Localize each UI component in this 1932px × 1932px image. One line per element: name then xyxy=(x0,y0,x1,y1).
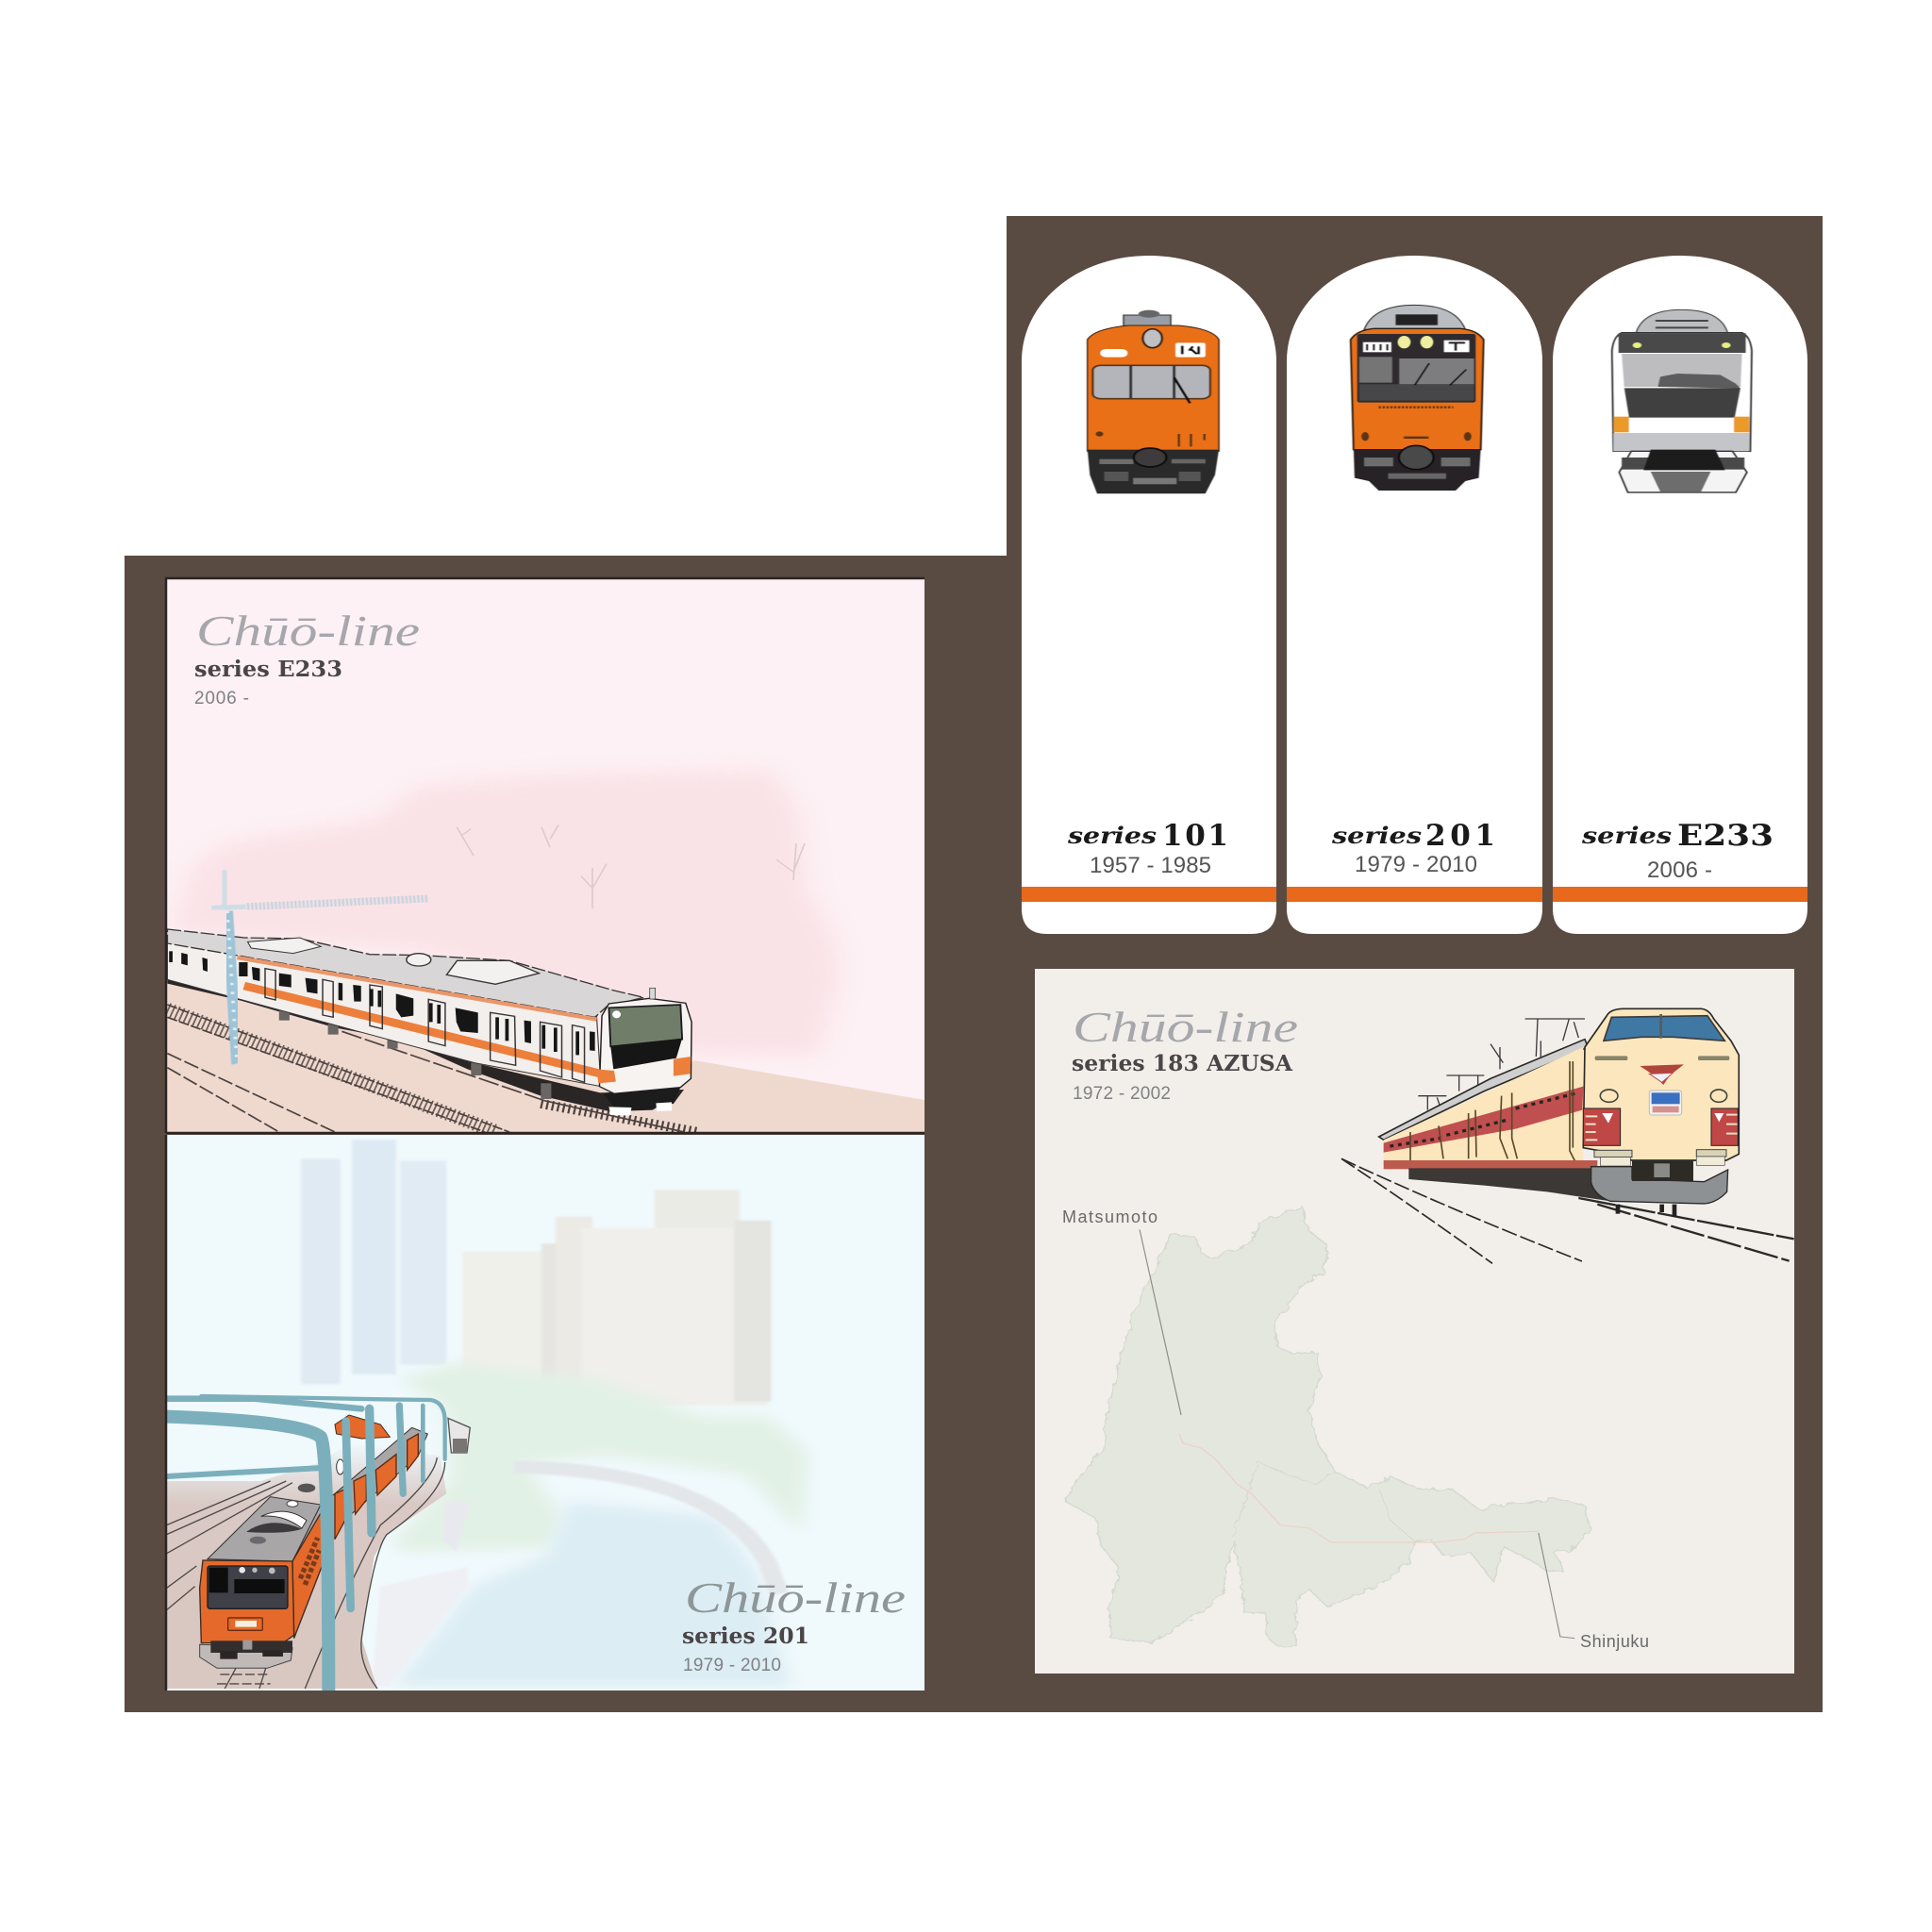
heading: series E233 xyxy=(194,657,342,682)
script title: Chūō-line xyxy=(685,1574,906,1622)
leader line Shinjuku xyxy=(1539,1533,1574,1639)
doors xyxy=(265,969,585,1082)
city buildings and river xyxy=(301,1140,808,1687)
train series 201 with catenary xyxy=(167,1396,470,1693)
script title: Chūō-line xyxy=(1073,1003,1298,1051)
years: 2006 - xyxy=(1647,858,1712,883)
train front E233 xyxy=(1612,309,1752,492)
train E233 xyxy=(167,929,698,1132)
orange stripe xyxy=(1287,887,1542,902)
tracks xyxy=(167,1005,698,1132)
panel: bookmark series 201 xyxy=(1287,256,1542,934)
panel: series E233 postcard xyxy=(165,577,924,1133)
side xyxy=(292,1507,324,1639)
cherry blossom cloud xyxy=(168,770,841,1056)
card border xyxy=(165,1135,167,1690)
pantographs xyxy=(1418,1019,1585,1110)
windows xyxy=(169,951,595,1051)
ground xyxy=(165,981,924,1132)
cab front xyxy=(599,998,691,1093)
roof unit xyxy=(208,1497,321,1561)
roof line xyxy=(1379,1040,1588,1140)
skirt xyxy=(1591,1167,1728,1204)
heading: series 183 AZUSA xyxy=(1072,1051,1293,1076)
years: 2006 - xyxy=(194,689,249,708)
heading: series 201 xyxy=(682,1624,809,1649)
orange stripe xyxy=(1022,887,1276,902)
roof xyxy=(167,929,643,1017)
years: 1979 - 2010 xyxy=(683,1656,781,1675)
panel: bookmark series E233 xyxy=(1553,256,1807,934)
stripes xyxy=(237,958,596,1020)
catenary xyxy=(167,1396,445,1693)
lattice pole xyxy=(227,911,237,1064)
train series 183 xyxy=(1341,1008,1794,1263)
underframe xyxy=(167,978,684,1111)
years: 1979 - 2010 xyxy=(1355,852,1477,877)
series label: series xyxy=(1581,822,1673,849)
series label: series xyxy=(1067,822,1158,849)
years: 1957 - 1985 xyxy=(1090,853,1211,878)
brown backing board xyxy=(125,216,1823,1712)
label Matsumoto: Matsumoto xyxy=(1062,1208,1158,1226)
catenary pole xyxy=(211,870,428,908)
bookmark shape xyxy=(1287,256,1542,934)
label Shinjuku: Shinjuku xyxy=(1580,1632,1649,1651)
bookmark shape xyxy=(1553,256,1807,934)
map: route from Matsumoto to Shinjuku xyxy=(1062,1206,1649,1651)
leader line Matsumoto xyxy=(1140,1229,1181,1415)
panel: bookmark series 101 xyxy=(1022,256,1276,934)
number label: 101 xyxy=(1162,819,1228,853)
station hut xyxy=(448,1418,470,1453)
script title: Chūō-line xyxy=(196,607,420,655)
body side xyxy=(167,942,601,1087)
front xyxy=(200,1560,294,1643)
cab xyxy=(1583,1008,1739,1160)
panel: series 183 AZUSA postcard xyxy=(1035,969,1794,1674)
number label: 201 xyxy=(1425,819,1495,853)
number label: E233 xyxy=(1677,819,1774,853)
card border xyxy=(166,578,924,1133)
side xyxy=(1384,1047,1583,1165)
far car xyxy=(335,1415,390,1439)
years: 1972 - 2002 xyxy=(1073,1084,1171,1104)
orange stripe xyxy=(1553,887,1807,902)
panel: series 201 postcard xyxy=(165,1135,924,1693)
series label: series xyxy=(1331,822,1423,849)
train front 101 xyxy=(1088,310,1219,493)
bookmark shape xyxy=(1022,256,1276,934)
underfloor xyxy=(1408,1168,1610,1201)
train front 201 xyxy=(1351,305,1484,491)
